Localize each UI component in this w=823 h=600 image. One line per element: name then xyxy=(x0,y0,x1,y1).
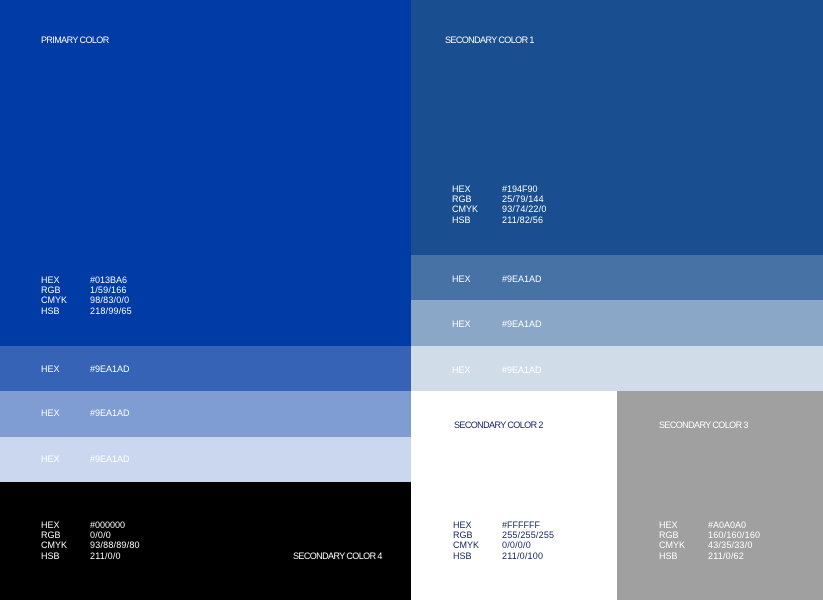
swatch: secondary tint 2: HEX xyxy=(452,319,471,329)
swatch: primary tint 2: #9EA1AD xyxy=(90,408,130,418)
secondary color 4 values: CMYK xyxy=(41,540,67,550)
secondary color 4 values: 93/88/89/80 xyxy=(90,540,140,550)
primary color values: RGB xyxy=(41,285,61,295)
primary color values: HSB xyxy=(41,306,60,316)
primary color values: 98/83/0/0 xyxy=(90,295,129,305)
secondary color 3 values xyxy=(659,520,760,561)
swatch: primary tint 2: HEX xyxy=(41,408,60,418)
swatch: secondary tint 1: #9EA1AD xyxy=(502,274,542,284)
secondary color 3 values: HEX xyxy=(659,520,678,530)
swatch: secondary tint 3 xyxy=(411,346,823,391)
secondary color 2 values: 255/255/255 xyxy=(502,530,554,540)
secondary color 2 values: HEX xyxy=(453,520,472,530)
secondary color 4 values: RGB xyxy=(41,530,61,540)
secondary color 1 values: RGB xyxy=(452,194,472,204)
swatch: primary tint 1 xyxy=(0,346,411,391)
secondary color 3 values: 43/35/33/0 xyxy=(708,540,753,550)
secondary color 2 values: HSB xyxy=(453,551,472,561)
swatch: secondary tint 1: HEX xyxy=(452,274,471,284)
secondary color 2 values: RGB xyxy=(453,530,473,540)
swatch: secondary tint 1 xyxy=(411,255,823,300)
secondary color 1 values: HEX xyxy=(452,184,471,194)
secondary color 3 values: #A0A0A0 xyxy=(708,520,746,530)
secondary color 1 values: CMYK xyxy=(452,204,478,214)
secondary color 1 values: HSB xyxy=(452,215,471,225)
heading: secondary color 1: SECONDARY COLOR 1 xyxy=(445,35,534,45)
heading: secondary color 2: SECONDARY COLOR 2 xyxy=(454,420,543,430)
heading: primary color: PRIMARY COLOR xyxy=(41,35,109,45)
primary color values: 1/59/166 xyxy=(90,285,127,295)
primary color values: HEX xyxy=(41,275,60,285)
secondary color 3 values: HSB xyxy=(659,551,678,561)
primary color values: 218/99/65 xyxy=(90,306,132,316)
secondary color 4 values: 0/0/0 xyxy=(90,530,111,540)
secondary color 2 values: #FFFFFF xyxy=(502,520,540,530)
secondary color 2 values: CMYK xyxy=(453,540,479,550)
secondary color 3 values: 211/0/62 xyxy=(708,551,744,561)
secondary color 1 values xyxy=(452,184,547,225)
secondary color 2 values: 211/0/100 xyxy=(502,551,543,561)
secondary color 4 values: HSB xyxy=(41,551,60,561)
secondary color 1 values: 211/82/56 xyxy=(502,215,543,225)
heading: secondary color 3: SECONDARY COLOR 3 xyxy=(659,420,748,430)
secondary color 1 values: 25/79/144 xyxy=(502,194,544,204)
swatch: primary tint 2 xyxy=(0,391,411,437)
secondary color 1 values: 93/74/22/0 xyxy=(502,204,547,214)
primary color values: #013BA6 xyxy=(90,275,127,285)
swatch: secondary tint 3: HEX xyxy=(452,365,471,375)
panel: secondary color 4 xyxy=(0,482,411,600)
swatch: primary tint 1: HEX xyxy=(41,364,60,374)
primary color values xyxy=(41,275,132,316)
swatch: primary tint 3 xyxy=(0,437,411,482)
panel: secondary color 3 xyxy=(617,391,823,600)
swatch: primary tint 1: #9EA1AD xyxy=(90,364,130,374)
secondary color 2 values: 0/0/0/0 xyxy=(502,540,531,550)
secondary color 1 values: #194F90 xyxy=(502,184,538,194)
panel: secondary color 2 xyxy=(411,391,617,600)
secondary color 2 values xyxy=(453,520,554,561)
panel: secondary color 1 xyxy=(411,0,823,255)
swatch: secondary tint 2 xyxy=(411,300,823,346)
secondary color 4 values: 211/0/0 xyxy=(90,551,121,561)
heading: secondary color 4: SECONDARY COLOR 4 xyxy=(293,551,382,561)
swatch: primary tint 3: #9EA1AD xyxy=(90,454,130,464)
secondary color 4 values xyxy=(41,520,140,561)
secondary color 3 values: RGB xyxy=(659,530,679,540)
secondary color 4 values: HEX xyxy=(41,520,60,530)
swatch: secondary tint 3: #9EA1AD xyxy=(502,365,542,375)
secondary color 3 values: 160/160/160 xyxy=(708,530,760,540)
primary color values: CMYK xyxy=(41,295,67,305)
secondary color 4 values: #000000 xyxy=(90,520,125,530)
panel: primary color xyxy=(0,0,411,346)
swatch: secondary tint 2: #9EA1AD xyxy=(502,319,542,329)
swatch: primary tint 3: HEX xyxy=(41,454,60,464)
secondary color 3 values: CMYK xyxy=(659,540,685,550)
